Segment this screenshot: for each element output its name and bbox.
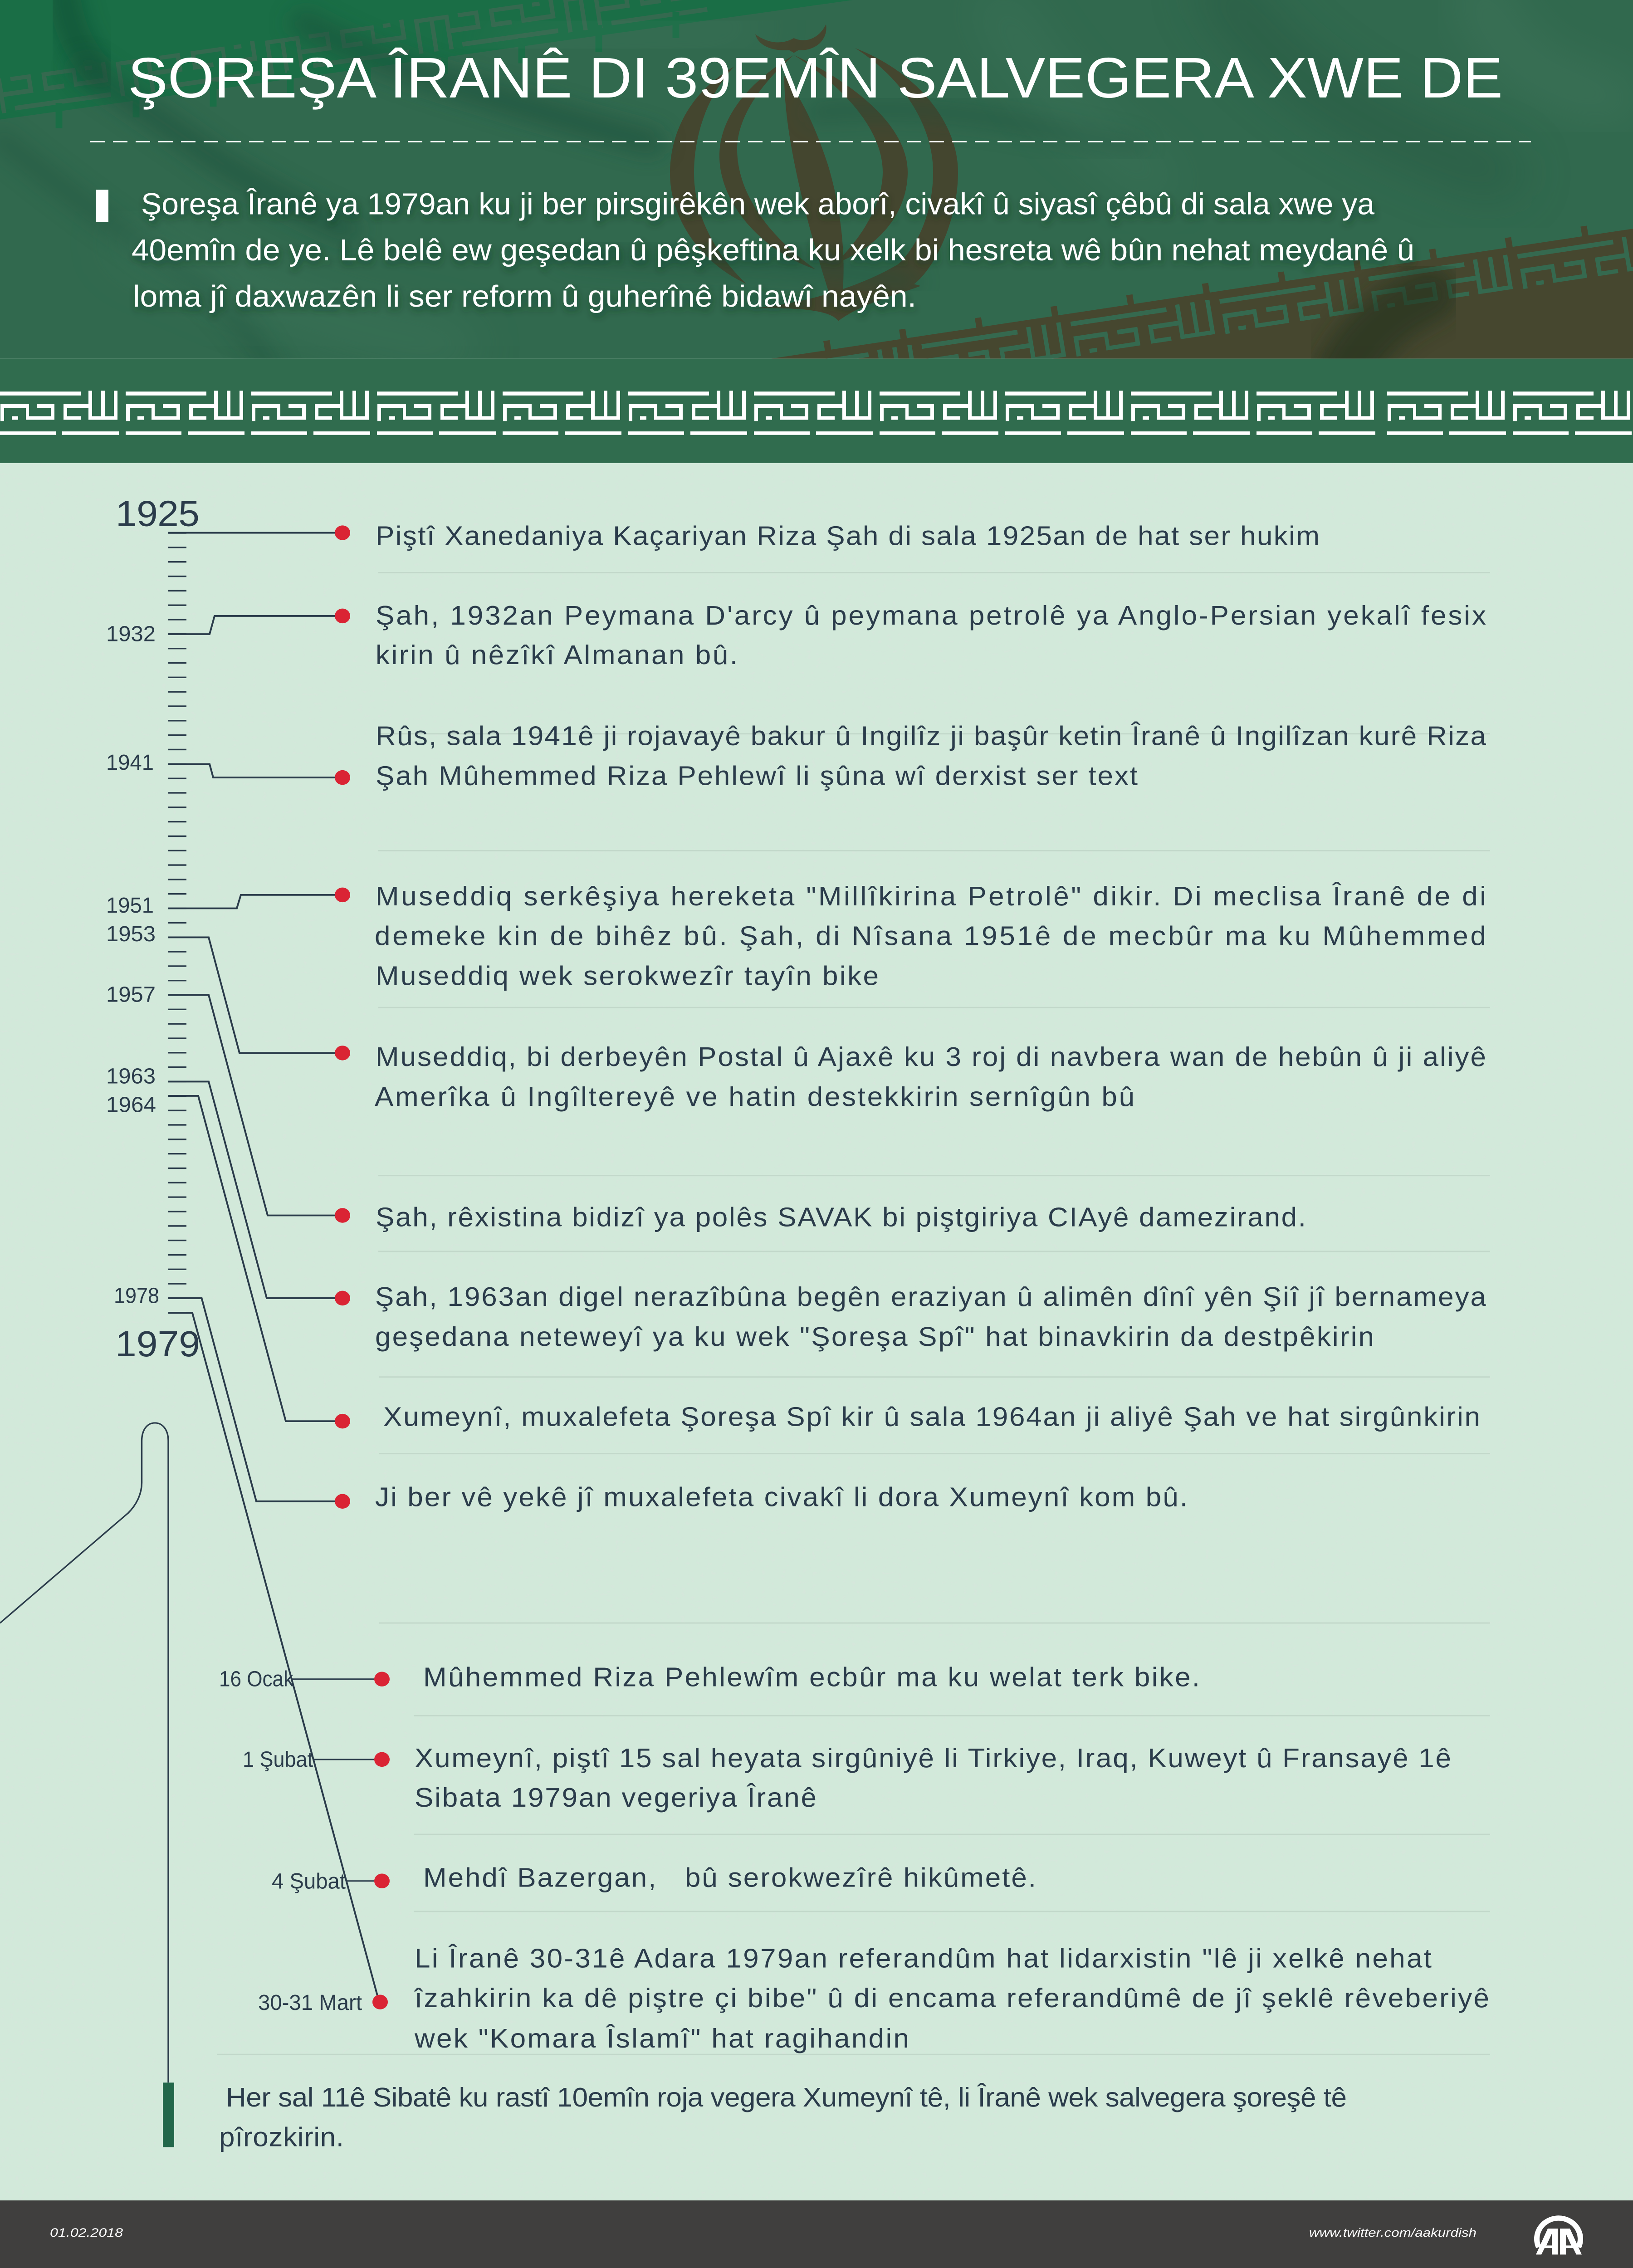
connector 1941 — [168, 764, 350, 785]
date labels: 16 Ocak — [219, 1667, 293, 1691]
event 1 Şubat text: Xumeynî, piştî 15 sal heyata sirgûniyê li Tirkiye, Iraq, Kuweyt û Fransayê 1ê — [415, 1743, 1451, 1773]
event 1932 text: kirin û nêzîkî Almanan bû. — [376, 640, 738, 670]
event 30-31 Mart text: wek "Komara Îslamî" hat ragihandin — [414, 2023, 909, 2053]
year labels: 1963 — [106, 1064, 156, 1088]
icon: AA logo — [1536, 2218, 1582, 2254]
closing note — [219, 2082, 1347, 2152]
connector 1964 — [168, 1096, 350, 1428]
date labels: 30-31 Mart — [258, 1991, 362, 2015]
event 1932 text: Şah, 1932an Peymana D'arcy û peymana petrolê ya Anglo-Persian yekalî fesix — [376, 600, 1486, 631]
event 1941 text — [376, 721, 1486, 791]
event 30-31 Mart text: îzahkirin ka dê piştre çi bibe" û di encama referandûmê de jî şeklê rêveberiyê — [414, 1983, 1489, 2013]
event 4 Şubat text: Mehdî Bazergan, bû serokwezîrê hikûmetê. — [423, 1862, 1036, 1892]
closing note: Her sal 11ê Sibatê ku rastî 10emîn roja vegera Xumeynî tê, li Îranê wek salvegera şoreşê tê — [226, 2082, 1347, 2112]
event 1941 text: Şah Mûhemmed Riza Pehlewî li şûna wî derxist ser text — [376, 761, 1138, 791]
event 1964 text: Xumeynî, muxalefeta Şoreşa Spî kir û sala 1964an ji aliyê Şah ve hat sirgûnkirin — [383, 1402, 1480, 1432]
curved timeline stem — [0, 1423, 168, 2082]
event 1963 text: geşedana neteweyî ya ku wek "Şoreşa Spî" hat binavkirin da destpêkirin — [375, 1321, 1374, 1352]
year labels: 1951 — [106, 894, 154, 918]
event 1925 text: Piştî Xanedaniya Kaçariyan Riza Şah di sala 1925an de hat ser hukim — [376, 521, 1320, 551]
date labels — [219, 1667, 362, 2015]
title: ŞOREŞA ÎRANÊ DI 39EMÎN SALVEGERA XWE DE — [128, 46, 1503, 110]
connector 1953 — [168, 937, 350, 1061]
event 1951 text: Museddiq serkêşiya hereketa "Millîkirina Petrolê" dikir. Di meclisa Îranê de di — [376, 881, 1486, 911]
event 30-31 Mart text — [414, 1943, 1489, 2053]
connector 1963 — [168, 1081, 350, 1305]
connector 1957 — [168, 995, 350, 1223]
event 1953 text: Amerîka û Ingîltereyê ve hatin destekkirin sernîgûn bû — [375, 1081, 1134, 1112]
connector 1951 — [168, 888, 350, 908]
event 1963 text: Şah, 1963an digel nerazîbûna begên eraziyan û alimên dînî yên Şiî jî bernameya — [375, 1281, 1486, 1312]
year label 1979: 1979 — [115, 1324, 200, 1364]
green script band — [0, 359, 1633, 463]
year labels: 1957 — [106, 983, 156, 1007]
intro text: Şoreşa Îranê ya 1979an ku ji ber pirsgirêkên wek aborî, civakî û siyasî çêbû di sala xwe ya — [141, 187, 1375, 221]
event 16 Ocak text: Mûhemmed Riza Pehlewîm ecbûr ma ku welat terk bike. — [423, 1662, 1200, 1692]
event 30-31 Mart text: Li Îranê 30-31ê Adara 1979an referandûm hat lidarxistin "lê ji xelkê nehat — [415, 1943, 1432, 1973]
timeline ruler ticks — [168, 532, 186, 1314]
event 1963 text — [375, 1281, 1486, 1352]
green stem foot — [163, 2082, 174, 2147]
connector 1978 — [168, 1298, 350, 1509]
connector 1932 — [168, 609, 350, 634]
year labels: 1978 — [114, 1284, 159, 1308]
footer bar — [0, 2200, 1633, 2268]
connector 1979 months — [168, 1313, 390, 2009]
event 1953 text — [375, 1041, 1486, 1112]
emblem — [670, 24, 958, 321]
event 1 Şubat text — [415, 1743, 1451, 1813]
event 1951 text — [375, 881, 1486, 991]
event 1957 text: Şah, rêxistina bidizî ya polês SAVAK bi piştgiriya CIAyê damezirand. — [376, 1202, 1306, 1232]
event 1941 text: Rûs, sala 1941ê ji rojavayê bakur û Ingilîz ji başûr ketin Îranê û Ingilîzan kurê Riza — [376, 721, 1486, 751]
flag red stripe with script band — [772, 226, 1633, 359]
fabric folds — [0, 0, 1615, 390]
event 1978 text: Ji ber vê yekê jî muxalefeta civakî li dora Xumeynî kom bû. — [375, 1482, 1188, 1512]
intro text — [132, 187, 1414, 313]
year labels: 1932 — [106, 622, 156, 646]
intro text: loma jî daxwazên li ser reform û guherînê bidawî nayên. — [133, 279, 916, 313]
header flag photo background — [0, 0, 1633, 359]
year labels: 1964 — [106, 1093, 156, 1117]
footer url: www.twitter.com/aakurdish — [1309, 2226, 1477, 2239]
event 1932 text — [376, 600, 1486, 670]
year labels: 1953 — [106, 922, 156, 946]
intro marker bar — [96, 190, 108, 222]
main light panel — [0, 463, 1633, 2200]
year labels: 1941 — [106, 751, 154, 775]
event 1951 text: demeke kin de bihêz bû. Şah, di Nîsana 1951ê de mecbûr ma ku Mûhemmed — [375, 921, 1486, 951]
flag green corner with script band — [0, 0, 853, 128]
year labels — [106, 622, 159, 1308]
dashed divider — [90, 141, 1531, 142]
closing note: pîrozkirin. — [219, 2122, 344, 2152]
event 1953 text: Museddiq, bi derbeyên Postal û Ajaxê ku 3 roj di navbera wan de hebûn û ji aliyê — [376, 1041, 1486, 1072]
year label 1925: 1925 — [116, 494, 200, 534]
connector 1925 — [168, 525, 350, 540]
date labels: 1 Şubat — [243, 1748, 313, 1772]
script pattern — [0, 391, 1632, 435]
event 1951 text: Museddiq wek serokwezîr tayîn bike — [376, 961, 879, 991]
intro text: 40emîn de ye. Lê belê ew geşedan û pêşkeftina ku xelk bi hesreta wê bûn nehat meydanê û — [132, 233, 1414, 267]
event 1 Şubat text: Sibata 1979an vegeriya Îranê — [415, 1782, 816, 1813]
date labels: 4 Şubat — [272, 1869, 346, 1893]
footer date: 01.02.2018 — [50, 2226, 123, 2239]
